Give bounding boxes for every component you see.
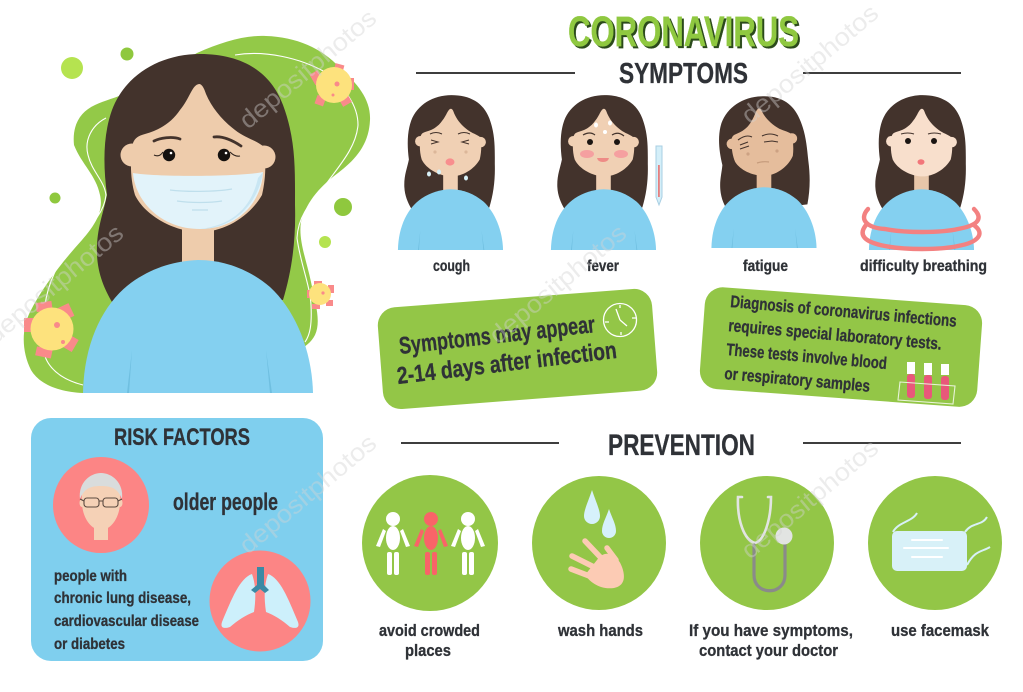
icon: facemask: [892, 513, 990, 571]
watermark: depositphotos: [736, 434, 884, 565]
prevention: avoid crowded places: avoid crowded: [379, 621, 480, 640]
watermark: depositphotos: [484, 219, 632, 350]
heading: symptoms: SYMPTOMS: [619, 58, 748, 90]
label: older people: older people: [173, 489, 278, 516]
label: chronic conditions: cardiovascular disease: [54, 613, 199, 630]
icon: lungs: [210, 550, 310, 652]
symptom: cough: cough: [433, 258, 470, 275]
callout: symptoms may appear: 2-14 days after infection: [396, 337, 618, 390]
prevention: avoid crowded places: [362, 475, 498, 660]
icon: test tubes: [898, 362, 955, 404]
callout: symptoms may appear: [376, 288, 659, 410]
prevention: contact your doctor: contact your doctor: [699, 641, 838, 660]
icon: older person: [53, 457, 149, 553]
eyes and brows: [154, 137, 241, 161]
title: CORONAVIRUS: [568, 8, 799, 56]
virus large: [24, 301, 79, 359]
neck: [182, 215, 214, 266]
prevention: avoid crowded places: places: [405, 641, 451, 660]
icon: water drops: [584, 490, 616, 538]
symptom: fever: fever: [587, 258, 619, 275]
icon: people: [376, 512, 485, 575]
icon: stethoscope: [738, 497, 792, 591]
background green blob: [24, 36, 370, 393]
face mask: [133, 172, 263, 229]
prevention: wash hands: [532, 476, 666, 640]
label: chronic conditions: chronic lung disease,: [54, 590, 191, 607]
heading: risk factors: RISK FACTORS: [114, 424, 250, 451]
symptom: fatigue: fatigue: [743, 258, 788, 275]
prevention: use facemask: [868, 476, 1002, 640]
main illustration: woman wearing mask: [24, 36, 370, 393]
prevention: contact your doctor: [689, 476, 853, 660]
callout: diagnosis: Diagnosis of coronavirus infections: [730, 292, 957, 331]
callout: diagnosis: These tests involve blood: [726, 340, 888, 373]
title: CORONAVIRUS: [570, 10, 801, 58]
callout: diagnosis: or respiratory samples: [724, 364, 871, 396]
callout: diagnosis: requires special laboratory tests.: [728, 316, 942, 354]
symptom: cough: [398, 95, 503, 275]
white line in blob: [44, 54, 358, 385]
watermark: depositphotos: [234, 4, 382, 135]
prevention: wash hands: wash hands: [557, 621, 643, 640]
symptom: difficulty breathing: [860, 95, 987, 275]
virus small right: [307, 281, 334, 309]
prevention: contact your doctor: If you have symptoms,: [689, 621, 853, 640]
label: chronic conditions: people with: [54, 568, 127, 585]
blue sweater: [83, 260, 313, 393]
heading: prevention: PREVENTION: [608, 429, 755, 462]
decorative dots: [50, 48, 352, 248]
watermark: depositphotos: [736, 0, 884, 130]
watermark: depositphotos: [234, 429, 382, 560]
label: chronic conditions: or diabetes: [54, 636, 125, 653]
panel: risk factors: [31, 418, 323, 661]
virus top right: [310, 63, 354, 107]
icon: hand: [571, 541, 624, 588]
symptom: fatigue: [711, 92, 817, 275]
callout: symptoms may appear: Symptoms may appear: [398, 311, 596, 360]
face: [120, 84, 276, 232]
symptom: fever: [551, 95, 662, 275]
thermometer: [656, 146, 662, 205]
symptom: difficulty breathing: difficulty breathing: [860, 258, 987, 275]
prevention: use facemask: use facemask: [891, 621, 989, 640]
watermark: [0, 0, 884, 565]
long hair: [97, 54, 295, 302]
callout: diagnosis: [699, 286, 983, 408]
icon: clock: [604, 304, 636, 336]
label: chronic conditions: [54, 568, 199, 653]
